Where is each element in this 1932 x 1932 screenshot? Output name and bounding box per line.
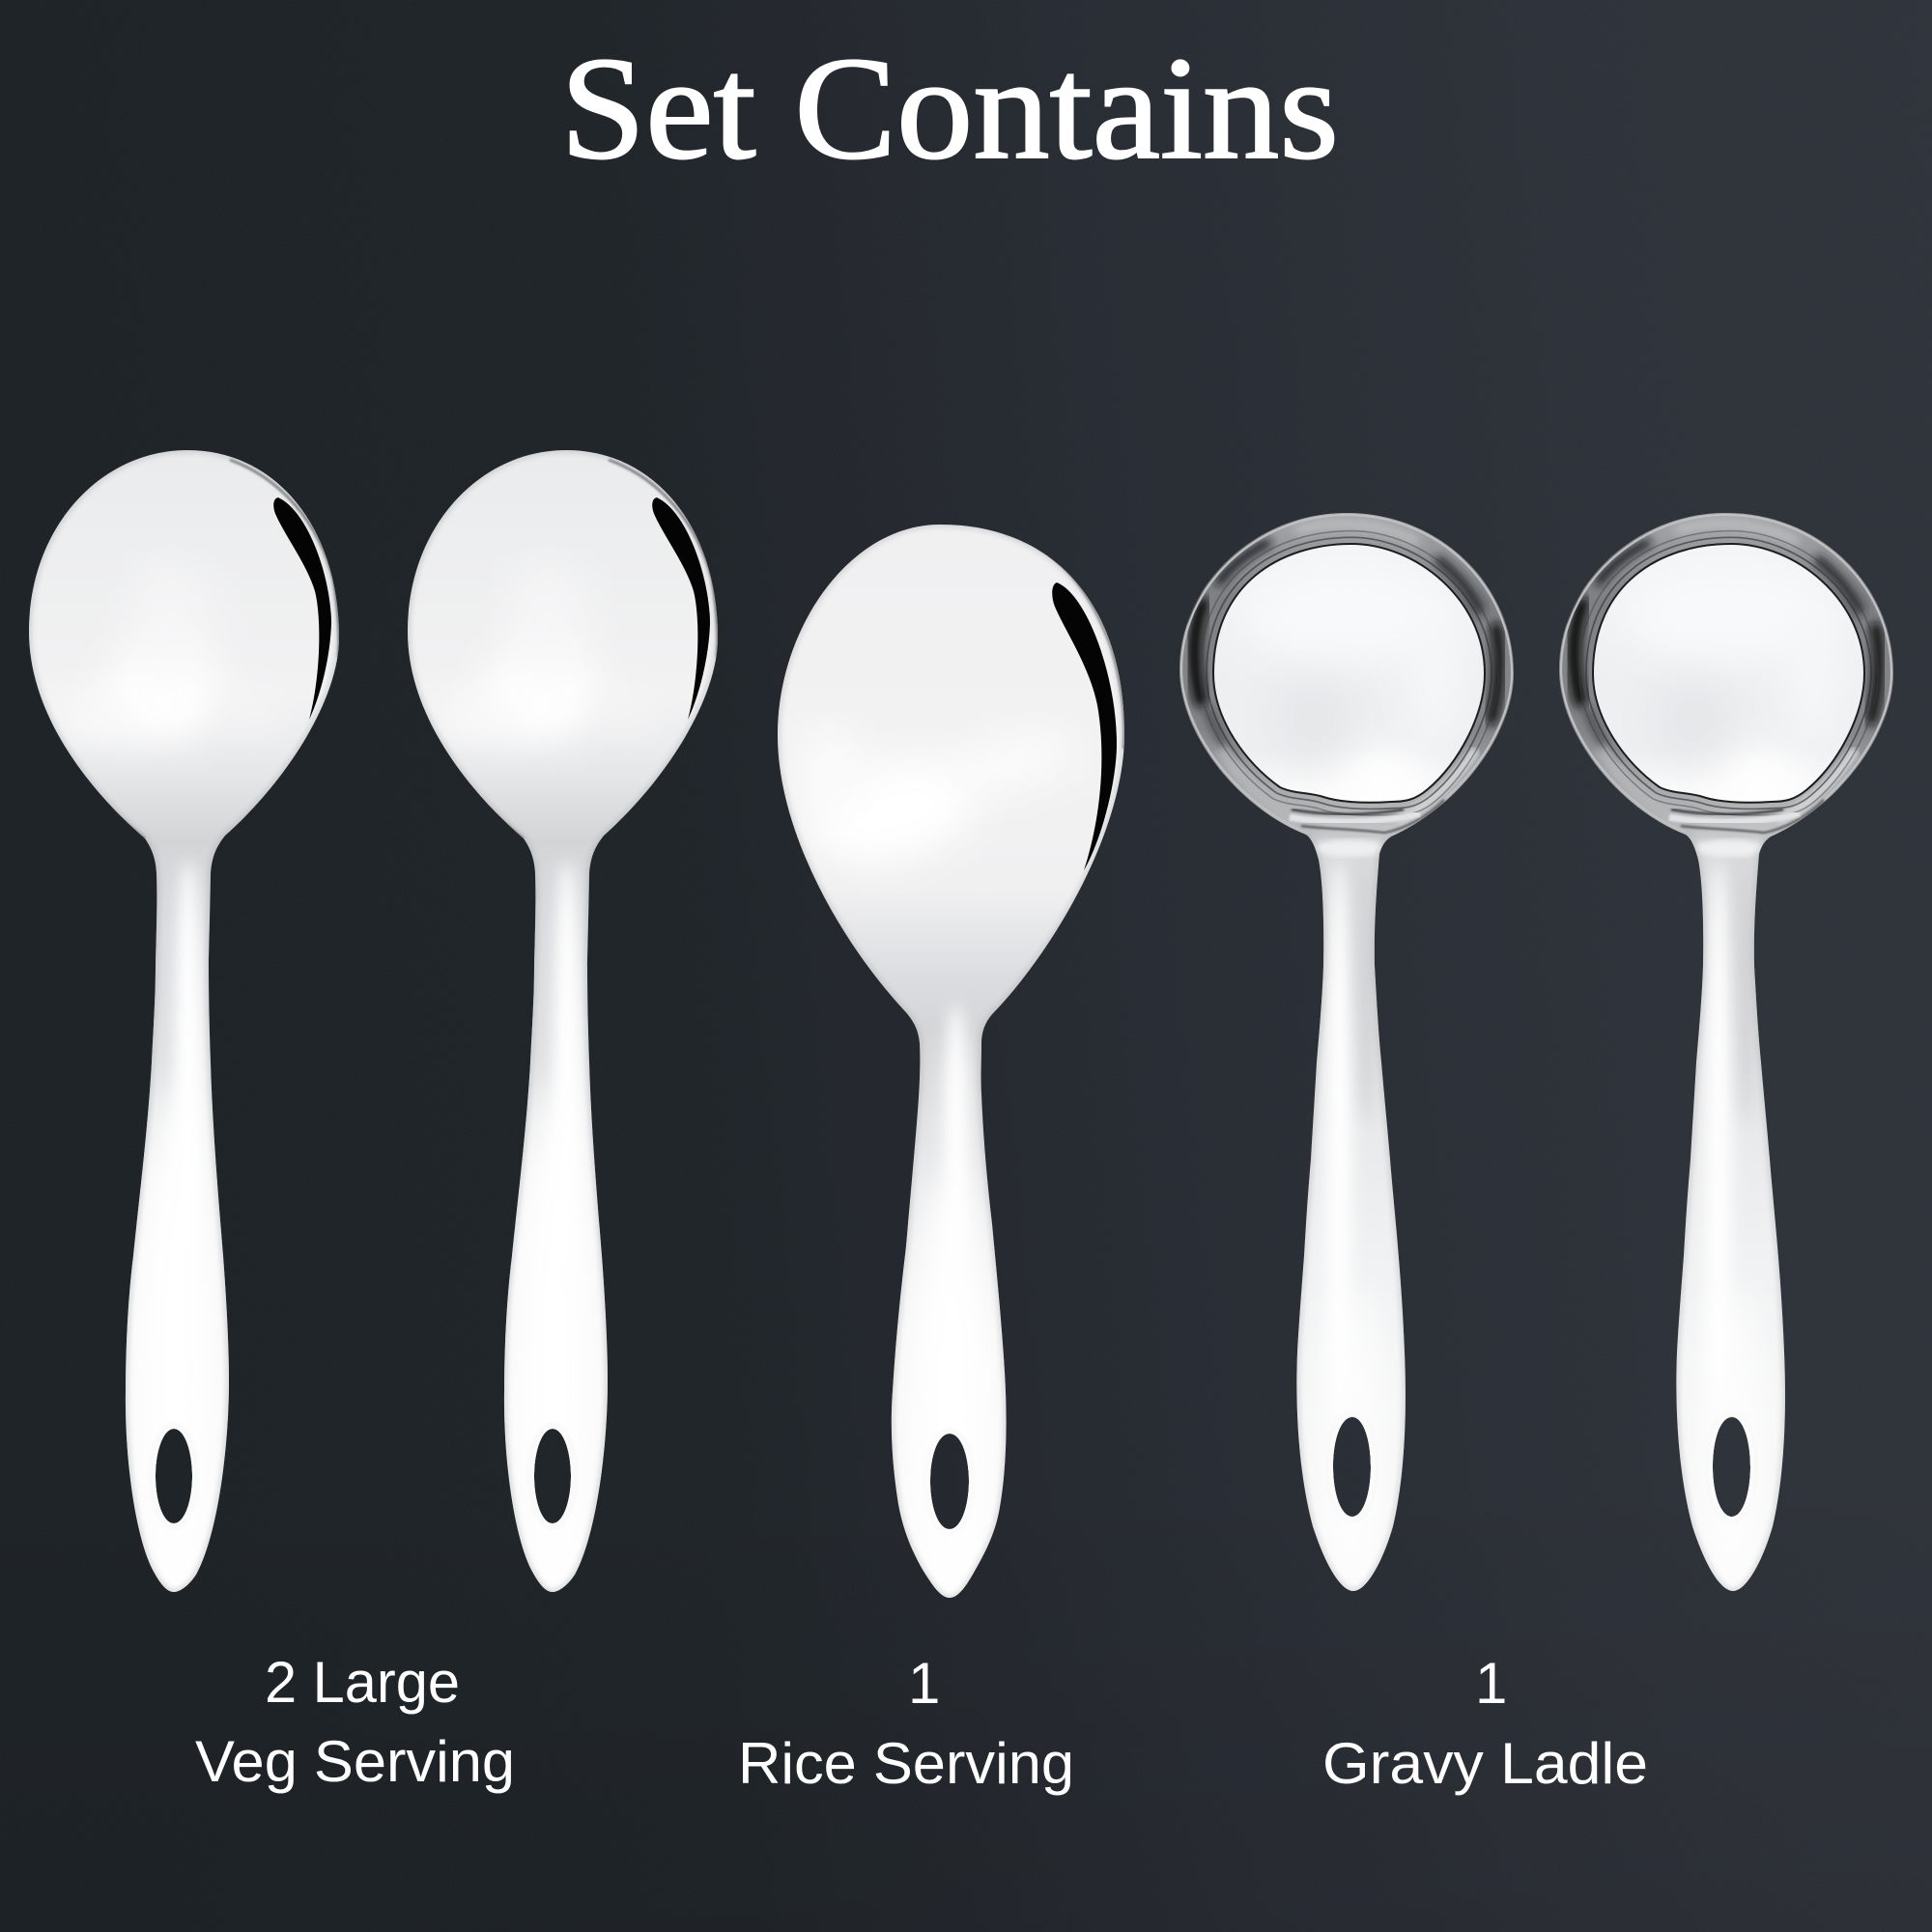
- title: Set Contains: [560, 27, 1339, 189]
- ladle: gravy 1: [1179, 513, 1514, 1613]
- spoon: rice serving: [778, 525, 1124, 1613]
- label: gravy ladle: [1322, 1651, 1648, 1796]
- label: rice serving: 1: [908, 1651, 940, 1716]
- label: gravy ladle: 1: [1475, 1651, 1507, 1716]
- label: veg serving: Veg Serving: [195, 1729, 515, 1794]
- spoon: large veg serving 2: [408, 450, 718, 1623]
- label: gravy ladle: Gravy Ladle: [1322, 1731, 1648, 1796]
- ladle: gravy 2: [1559, 513, 1893, 1613]
- reflection: [1052, 582, 1117, 870]
- label: rice serving: [738, 1651, 1074, 1796]
- spoon: large veg serving 1: [29, 450, 339, 1623]
- label: veg serving: 2 Large: [265, 1650, 460, 1715]
- label: rice serving: Rice Serving: [738, 1731, 1074, 1796]
- label: veg serving: [195, 1650, 515, 1794]
